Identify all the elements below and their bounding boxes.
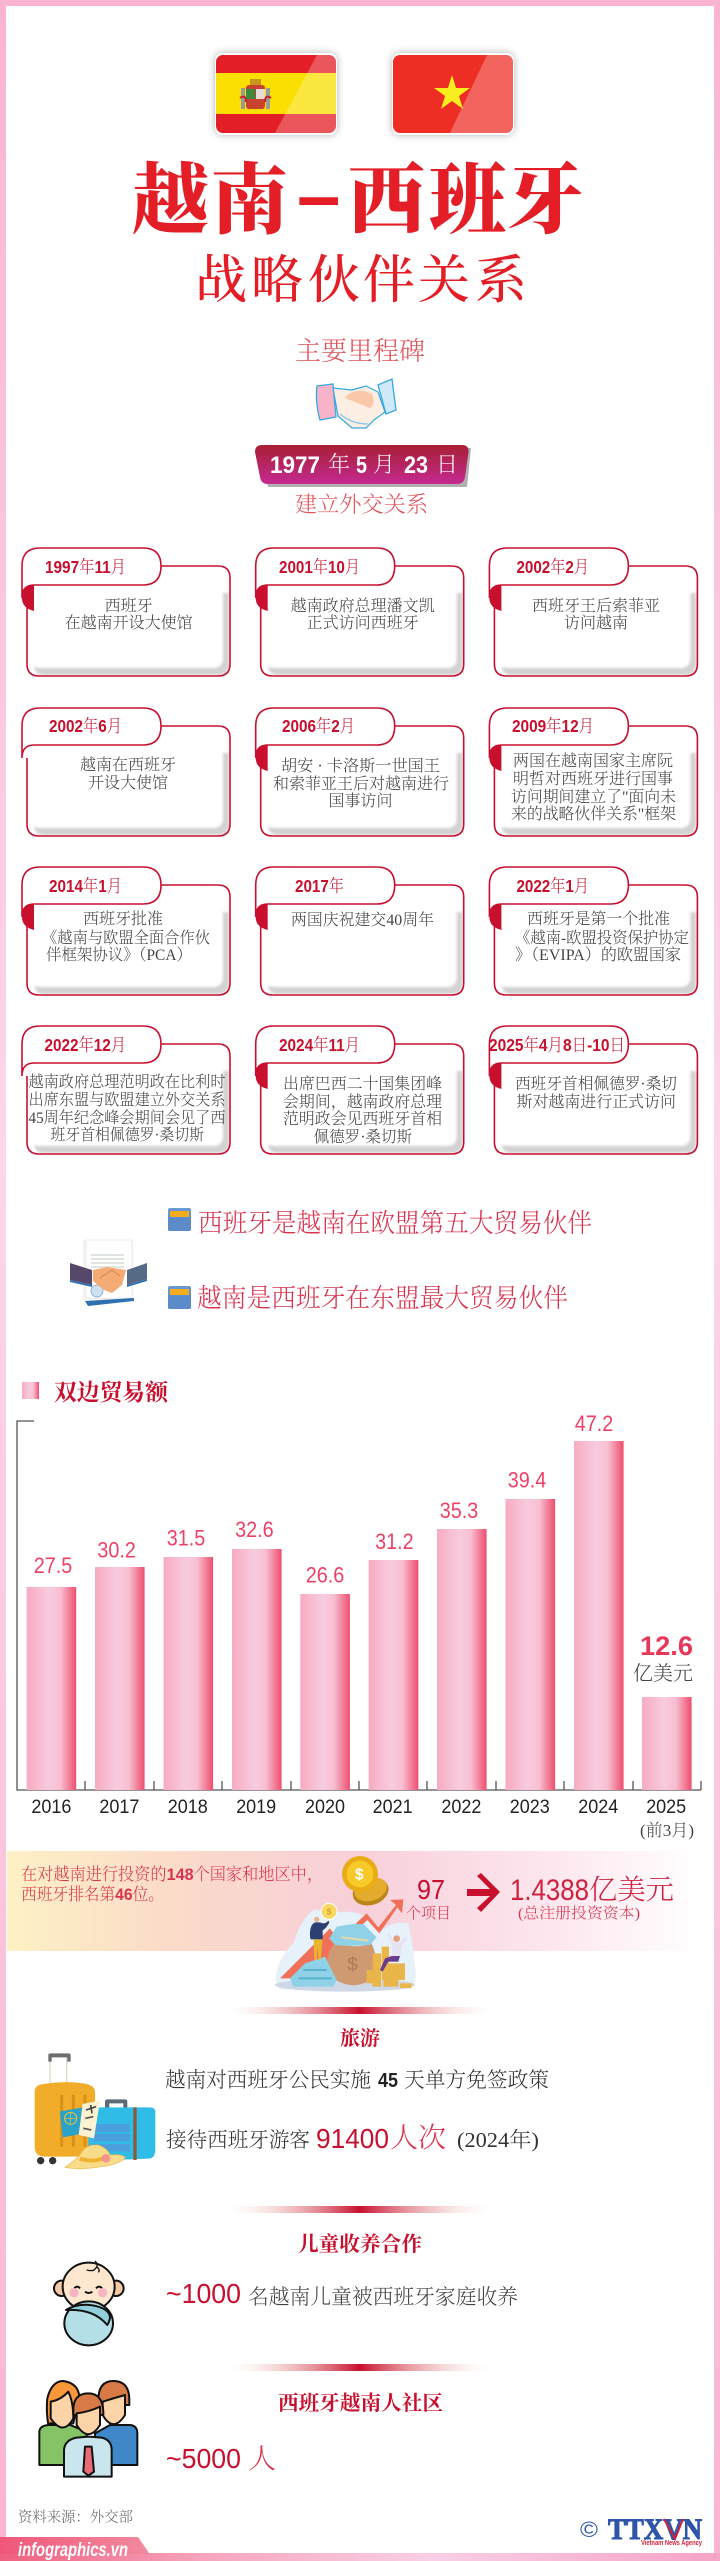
date banner: 1977-05-23: 1977: [270, 452, 320, 479]
heading: bilateral trade: 双边贸易额: [54, 1380, 170, 1405]
text: total registered capital: [510, 1874, 674, 1922]
bar chart: bilateral trade: 2025: [646, 1797, 686, 1818]
logo: TTXVN Vietnam News Agency: ©: [580, 2517, 598, 2542]
panel: milestone 2014-01: 2014年1月: [49, 876, 122, 896]
icon: investment illustration: $: [327, 1907, 332, 1917]
panel: milestone 2002-06: 2002年6月: [49, 716, 122, 736]
title part two: 西班牙: [348, 158, 584, 244]
panel: milestone 2006-02: 2006年2月: [282, 716, 355, 736]
bar chart: bilateral trade: 亿美元: [633, 1662, 693, 1685]
panel: milestone 2006-02: [256, 708, 464, 836]
text: adopted children: ~1000: [166, 2278, 241, 2309]
text: visa exemption policy: 越南对西班牙公民实施: [165, 2068, 371, 2092]
panel: milestone 2022-12: 出席东盟与欧盟建立外交关系: [28, 1091, 226, 1109]
text: adopted children: 名越南儿童被西班牙家庭收养: [248, 2285, 518, 2309]
panel: milestone 2022-01: 《越南-欧盟投资保护协定: [515, 929, 689, 947]
panel: milestone 2006-02: 胡安 · 卡洛斯一世国王: [281, 757, 440, 775]
panel: milestone 2025-04: 西班牙首相佩德罗·桑切: [515, 1075, 677, 1093]
date banner: 1977-05-23: 月: [373, 452, 395, 477]
icon: group of people: [39, 2381, 137, 2477]
text: Spanish visitors in 2024: [166, 2122, 539, 2154]
panel: milestone 2024-11: [256, 1026, 464, 1154]
panel: milestone 2009-12: [489, 708, 697, 836]
bar chart: bilateral trade: 2019: [236, 1797, 276, 1818]
panel: milestone 2017: 2017年: [295, 876, 344, 896]
panel: milestone 2022-01: 》（EVIPA）的欧盟国家: [515, 946, 681, 964]
bar chart: bilateral trade: 2016: [31, 1797, 71, 1818]
arrow: projects to capital: [467, 1873, 500, 1912]
divider: community: [230, 2364, 489, 2371]
bar chart: bilateral trade: 31.5: [167, 1526, 205, 1550]
title dash: –: [297, 151, 340, 239]
bar chart: bilateral trade: 30.2: [97, 1538, 136, 1562]
panel: milestone 2009-12: 明哲对西班牙进行国事: [513, 770, 673, 788]
icon: swaddled baby: [54, 2261, 124, 2345]
bar chart: bilateral trade: [17, 1411, 701, 1840]
panel: milestone 2025-04: 斯对越南进行正式访问: [516, 1093, 676, 1111]
text: total registered capital: 1.4388: [510, 1874, 589, 1907]
icon: folder 1: [168, 1208, 191, 1231]
text: 97 projects: 个项目: [406, 1905, 451, 1922]
bar chart: bilateral trade: 2017: [99, 1797, 139, 1818]
panel: milestone 2009-12: 来的战略伙伴关系"框架: [511, 805, 676, 823]
panel: milestone 2024-11: 范明政会见西班牙首相: [283, 1110, 442, 1128]
panel: milestone 2025-04: 2025年4月8日-10日: [489, 1035, 625, 1055]
text: Spanish visitors in 2024: 接待西班牙游客: [166, 2128, 310, 2152]
icon: handshake: [316, 379, 396, 428]
text: Spanish visitors in 2024: 人次: [390, 2122, 446, 2154]
text: Spain ranks 46th among investors: [21, 1864, 323, 1904]
text: source: 资料来源：外交部: [18, 2509, 133, 2526]
icon: chart heading marker: [22, 1382, 39, 1399]
panel: investment band: [7, 1851, 700, 1951]
text: visa exemption policy: [165, 2068, 549, 2092]
text: visa exemption policy: 45: [378, 2070, 398, 2092]
logo: TTXVN Vietnam News Agency: Vietnam News Agency: [641, 2540, 702, 2547]
panel: milestone 2025-04: [489, 1026, 697, 1154]
text: visa exemption policy: 天单方免签政策: [404, 2068, 549, 2092]
panel: milestone 2017: [256, 867, 464, 995]
logo: TTXVN Vietnam News Agency: TTXVN: [608, 2513, 702, 2546]
panel: milestone 2014-01: 《越南与欧盟全面合作伙: [42, 929, 210, 947]
footer bar: [0, 2553, 720, 2561]
panel: milestone 2002-06: 越南在西班牙: [80, 756, 176, 774]
panel: milestone 1997-11: 在越南开设大使馆: [65, 614, 193, 632]
bar chart: bilateral trade: 2020: [305, 1797, 345, 1818]
bar chart: bilateral trade: 47.2: [575, 1411, 613, 1436]
icon: flag of Spain: [215, 53, 337, 135]
text: community size: [166, 2443, 276, 2475]
bar chart: bilateral trade: 35.3: [440, 1498, 478, 1523]
panel: milestone 2022-12: 班牙首相佩德罗·桑切斯: [50, 1126, 204, 1144]
subtitle: 战略伙伴关系: [195, 253, 527, 310]
bar chart: bilateral trade: 2021: [373, 1797, 413, 1818]
text: Spanish visitors in 2024: (2024年): [457, 2128, 539, 2152]
bar chart: bilateral trade: (前3月): [640, 1821, 694, 1840]
panel: milestone 2002-02: [489, 548, 697, 676]
icon: folder 2: [168, 1286, 191, 1309]
panel: milestone 2017: 两国庆祝建交40周年: [291, 910, 434, 929]
date banner: 1977-05-23: 年: [328, 452, 350, 477]
text: total registered capital: (总注册投资资本): [518, 1904, 640, 1922]
divider: adoption: [230, 2206, 489, 2213]
bar chart: bilateral trade: 2018: [168, 1797, 208, 1818]
panel: milestone 2006-02: 和索菲亚王后对越南进行: [273, 774, 449, 793]
bar chart: bilateral trade: 12.6: [640, 1631, 693, 1661]
text: Spanish visitors in 2024: 91400: [316, 2123, 389, 2154]
panel: milestone 2022-01: 西班牙是第一个批准: [527, 910, 670, 928]
icon: suitcases, passport and hat: [35, 2053, 155, 2169]
panel: milestone 2001-10: 2001年10月: [279, 557, 360, 577]
panel: milestone 1997-11: 1997年11月: [45, 557, 126, 577]
panel: milestone 2002-06: 开设大使馆: [88, 774, 168, 792]
panel: milestone 2022-12: 45周年纪念峰会期间会见了西: [28, 1108, 226, 1127]
panel: milestone 2001-10: 越南政府总理潘文凯: [291, 597, 435, 615]
panel: milestone 2014-01: [22, 867, 230, 995]
icon: investment illustration: $: [347, 1954, 358, 1975]
icon: investment illustration: [275, 1899, 416, 1992]
panel: milestone 2006-02: 国事访问: [328, 792, 393, 810]
bar chart: bilateral trade: 2024: [578, 1797, 619, 1818]
panel: milestone 2024-11: 2024年11月: [279, 1035, 360, 1055]
title: 越南: [132, 158, 288, 244]
heading: Vietnamese community in Spain: 西班牙越南人社区: [278, 2392, 443, 2415]
icon: signed contract handshake: [70, 1240, 147, 1306]
panel: milestone 2002-02: 2002年2月: [516, 557, 589, 577]
panel: milestone 2002-06: [22, 708, 230, 836]
date banner: 1977-05-23: 5: [356, 452, 367, 479]
panel: milestone 2024-11: 出席巴西二十国集团峰: [283, 1075, 442, 1093]
date banner: 1977-05-23: 23: [404, 452, 428, 479]
text: community size: 人: [248, 2444, 276, 2475]
text: Vietnam is Spain's largest ASEAN trade partner: 越南是西班牙在东盟最大贸易伙伴: [197, 1284, 568, 1313]
text: adopted children: [166, 2278, 518, 2309]
footer tab: infographics.vn: infographics.vn: [18, 2540, 128, 2561]
bar chart: bilateral trade: 27.5: [34, 1553, 72, 1578]
bar chart: bilateral trade: 26.6: [306, 1562, 344, 1588]
text: total registered capital: 亿美元: [589, 1874, 674, 1906]
panel: milestone 2024-11: 会期间，越南政府总理: [283, 1093, 442, 1111]
text: community size: ~5000: [166, 2443, 241, 2474]
panel: milestone 2009-12: 两国在越南国家主席阮: [513, 752, 673, 770]
text: Spain ranks 46th among investors: 在对越南进行投资的148个国家和地区中，: [21, 1864, 323, 1884]
panel: milestone 2009-12: 访问期间建立了"面向未: [511, 788, 676, 806]
panel: milestone 2002-02: 访问越南: [564, 614, 628, 632]
icon: flag of Vietnam: [392, 53, 514, 135]
panel: milestone 2022-12: [22, 1026, 230, 1154]
bar chart: bilateral trade: 2023: [510, 1797, 550, 1818]
bar chart: bilateral trade: 2022: [441, 1797, 481, 1818]
date banner: 1977-05-23: 日: [436, 452, 458, 477]
caption: establishment of diplomatic relations: 建立外交关系: [295, 492, 428, 517]
heading: child adoption cooperation: 儿童收养合作: [298, 2233, 423, 2256]
bar chart: bilateral trade: 39.4: [508, 1468, 546, 1492]
panel: milestone 1997-11: 西班牙: [105, 597, 153, 615]
divider: tourism: [230, 2007, 489, 2014]
icon: gold coins: $: [355, 1866, 364, 1883]
text: Spain is Vietnam's fifth-largest EU trade partner: 西班牙是越南在欧盟第五大贸易伙伴: [198, 1209, 592, 1238]
panel: milestone 1997-11: [22, 548, 230, 676]
logo: TTXVN Vietnam News Agency: [580, 2513, 702, 2547]
panel: milestone 2022-01: [489, 867, 697, 995]
bar chart: bilateral trade: 32.6: [235, 1517, 274, 1542]
text: 97 projects: 97: [417, 1874, 445, 1905]
panel: milestone 2022-12: 越南政府总理范明政在比利时: [28, 1073, 226, 1091]
panel: milestone 2009-12: 2009年12月: [512, 716, 594, 736]
panel: milestone 2022-12: 2022年12月: [44, 1035, 126, 1055]
bar chart: bilateral trade: 31.2: [375, 1529, 414, 1554]
icon: gold coins: [342, 1856, 392, 1910]
heading: tourism: 旅游: [340, 2027, 380, 2050]
date banner: 1977-05-23: [255, 445, 471, 487]
panel: milestone 2001-10: [256, 548, 464, 676]
panel: milestone 2001-10: 正式访问西班牙: [307, 614, 419, 632]
panel: milestone 2014-01: 伴框架协议》（PCA）: [46, 946, 192, 964]
text: Spain ranks 46th among investors: 西班牙排名第46位。: [21, 1885, 164, 1904]
panel: milestone 2024-11: 佩德罗·桑切斯: [314, 1128, 412, 1146]
text: 97 projects: [406, 1874, 451, 1922]
panel: milestone 2022-01: 2022年1月: [516, 876, 589, 896]
heading: main milestones: 主要里程碑: [295, 337, 425, 366]
panel: milestone 2014-01: 西班牙批准: [83, 910, 163, 928]
panel: milestone 2002-02: 西班牙王后索菲亚: [532, 596, 660, 615]
